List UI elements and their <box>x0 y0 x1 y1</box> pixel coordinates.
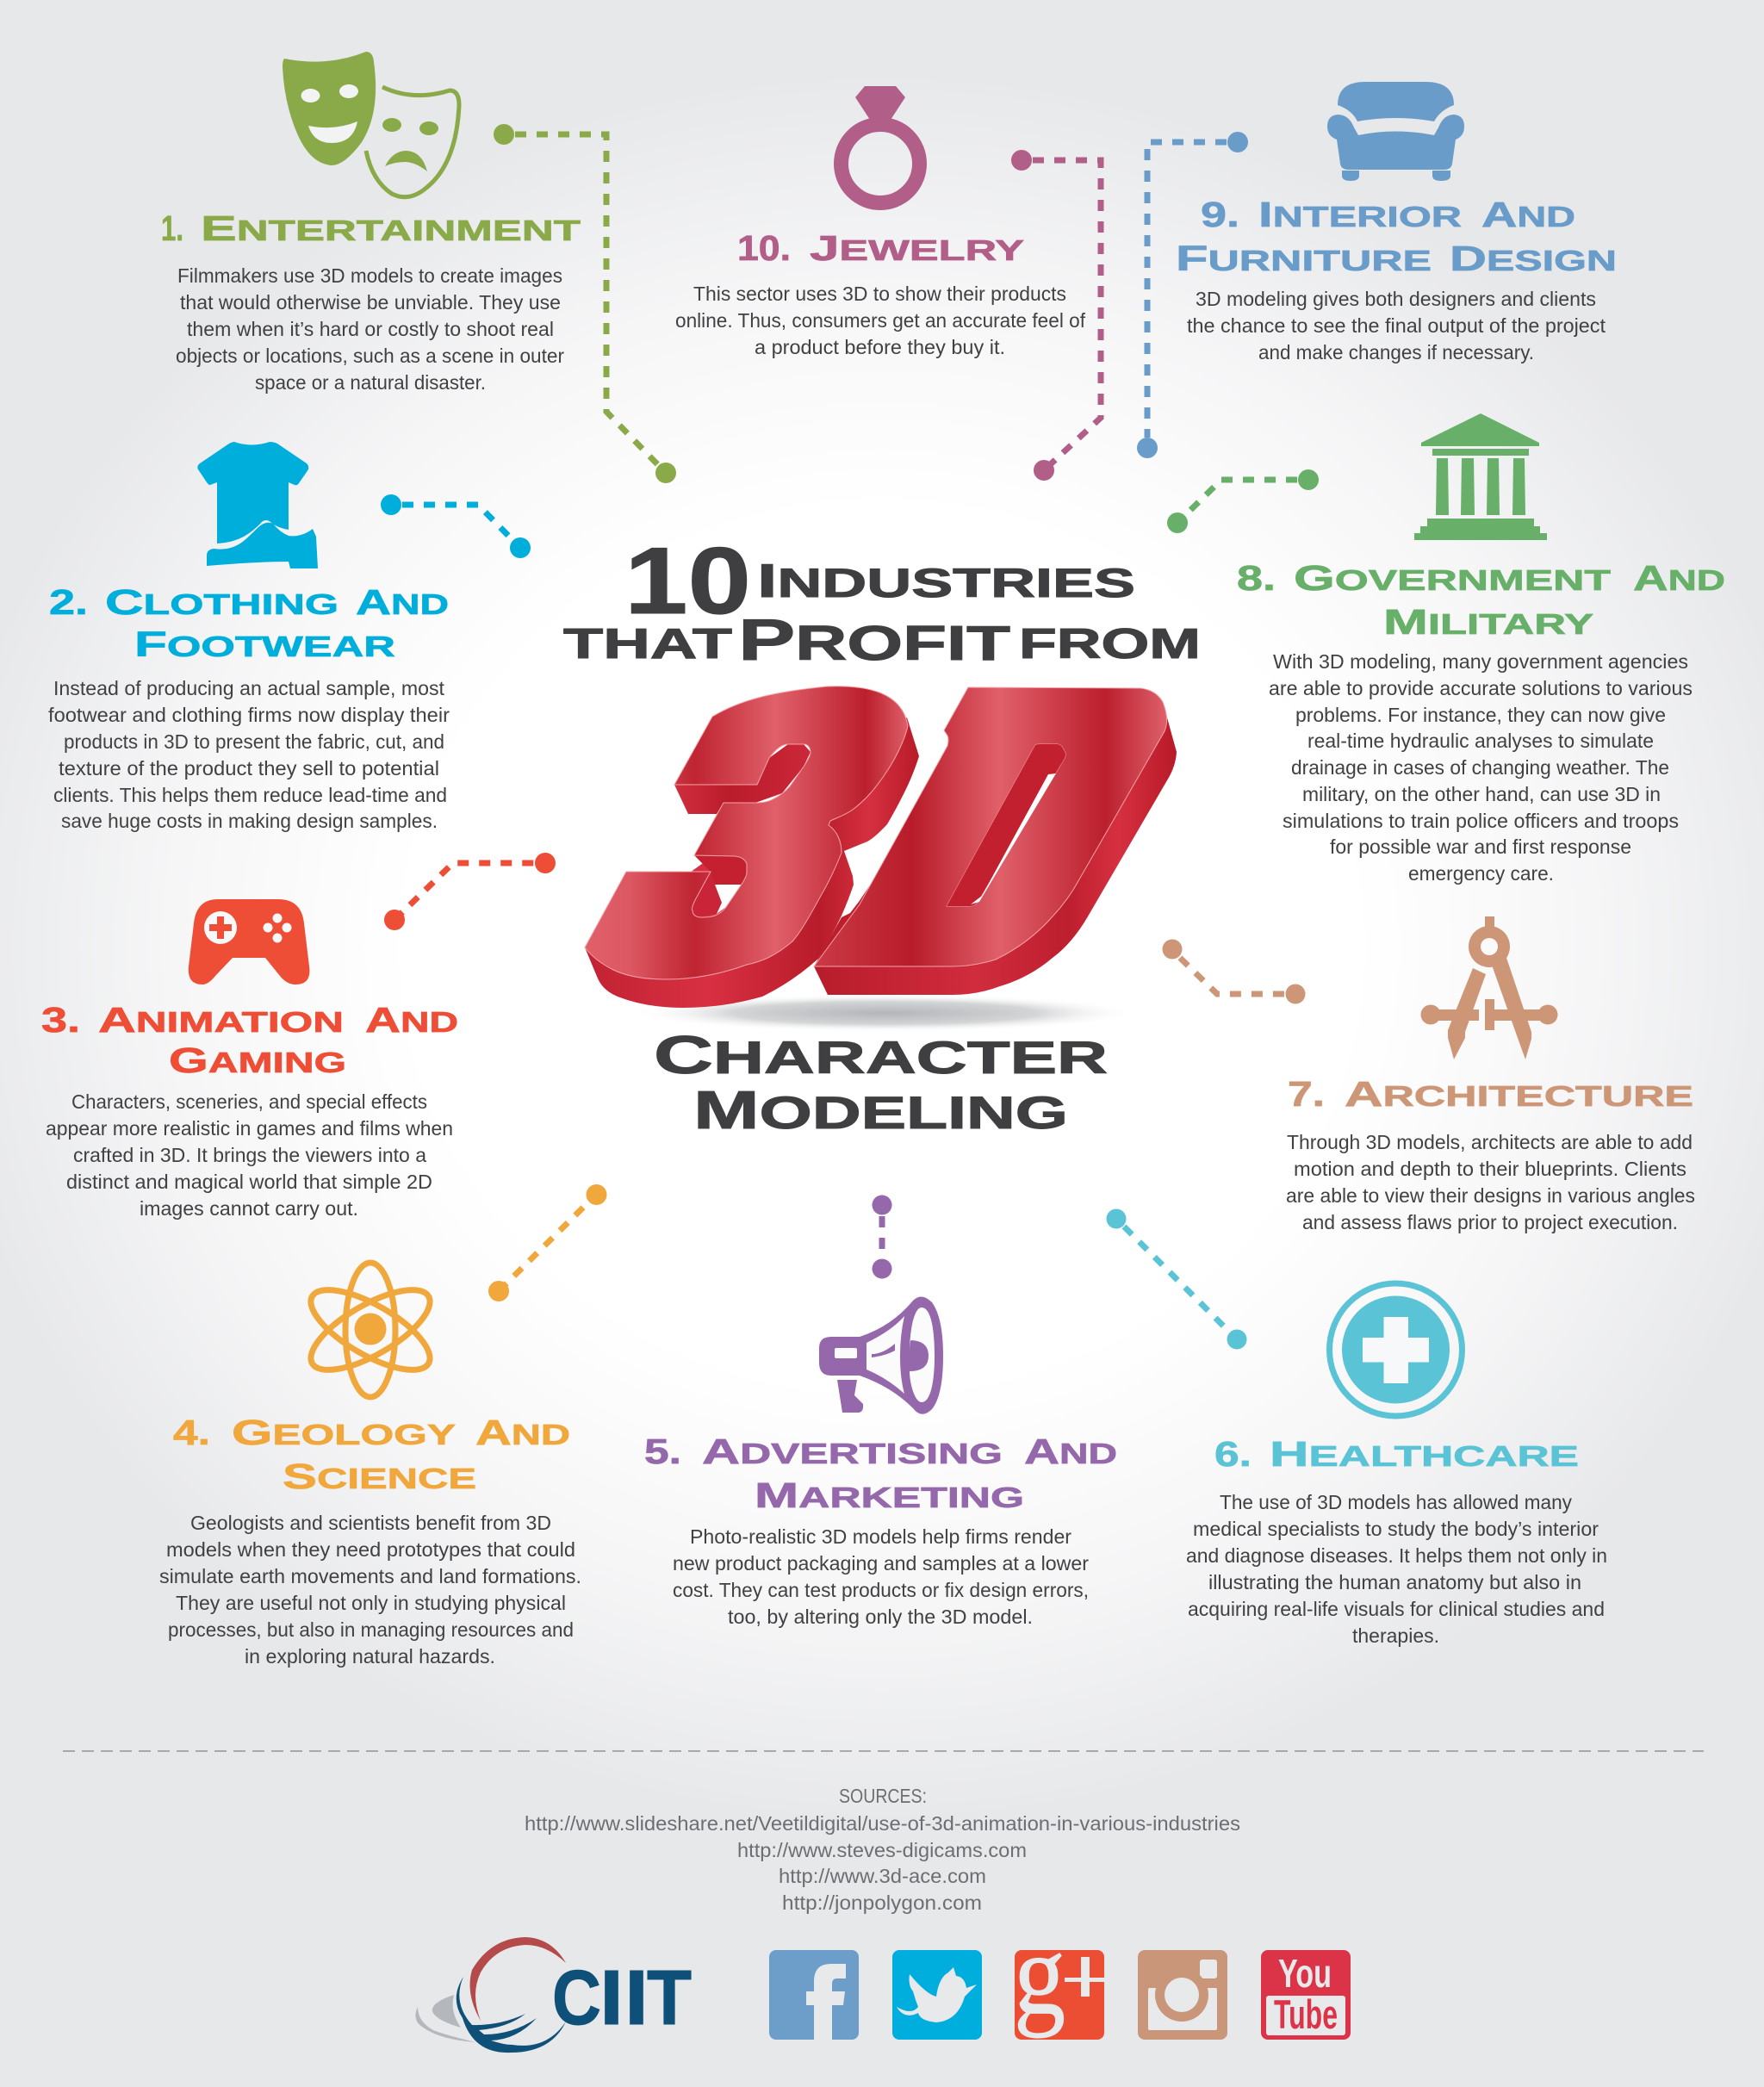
title: that Profit from: THAT <box>563 621 732 668</box>
heading: Government and Military: A ND <box>1633 558 1725 598</box>
text: Government description: drainage in cases of changing weather. The <box>1291 756 1669 779</box>
text: Clothing description: clients. This helps them reduce lead-time and <box>53 784 447 806</box>
text: sources: http://www.slideshare.net/Veetildigital/use-of-3d-animation-in-various-industries <box>525 1812 1240 1835</box>
text: Clothing description: Instead of producing an actual sample, most <box>53 677 444 699</box>
title: 10 Industries <box>624 528 1135 634</box>
heading: Clothing and Footwear: F OOTWEAR <box>134 624 395 664</box>
icon: shirt and shoe <box>197 442 318 568</box>
heading: Geology and Science: 4. <box>173 1413 210 1452</box>
heading: Architecture: A RCHITECTURE <box>1345 1074 1693 1114</box>
text: Animation description: images cannot carry out. <box>140 1197 358 1220</box>
heading: Interior and Furniture Design: 9. <box>1201 195 1239 234</box>
icon: ring <box>841 86 920 203</box>
graphic: red 3D letters <box>585 686 1177 1032</box>
heading: Animation and Gaming: A NIMATION <box>98 1000 344 1040</box>
heading: Jewelry: J EWELRY <box>810 228 1024 268</box>
heading: Clothing and Footwear: A ND <box>356 582 449 622</box>
icon: atom <box>300 1263 441 1397</box>
heading: Geology and Science: A ND <box>475 1413 570 1452</box>
heading: Government and Military: G OVERNMENT <box>1294 558 1612 598</box>
text: Geology description: in exploring natural hazards. <box>245 1645 495 1668</box>
heading: Animation and Gaming: G AMING <box>169 1040 346 1080</box>
text: Jewelry description: a product before they buy it. <box>755 336 1005 358</box>
text: sources: http://jonpolygon.com <box>782 1891 982 1914</box>
text: Healthcare description: and diagnose diseases. It helps them not only in <box>1186 1544 1607 1567</box>
icon: Twitter <box>892 1950 982 2040</box>
text: Advertising description: cost. They can test products or fix design errors, <box>673 1579 1089 1601</box>
icon: sofa <box>1327 82 1464 181</box>
icon: Instagram <box>1138 1950 1227 2040</box>
text: Advertising description <box>673 1525 1089 1628</box>
heading: Government and Military: 8. <box>1237 558 1276 598</box>
arrow: Animation connector <box>384 853 556 930</box>
title: Character Modeling: M ODELING <box>693 1081 1068 1140</box>
text: Geology description: Geologists and scientists benefit from 3D <box>190 1512 551 1534</box>
icon: Google Plus: g <box>1014 1910 1065 2039</box>
text: Animation description: Characters, sceneries, and special effects <box>71 1090 427 1113</box>
heading: Interior and Furniture Design: INTERIOR <box>1258 195 1462 234</box>
arrow: Government connector <box>1167 469 1319 533</box>
arrow: Interior connector <box>1137 132 1248 458</box>
title: Character Modeling <box>654 1026 1108 1140</box>
text: Government description: simulations to train police officers and troops <box>1283 810 1679 832</box>
text: Government description: emergency care. <box>1408 862 1554 885</box>
icon: theatre masks <box>283 52 459 197</box>
text: Entertainment description: that would otherwise be unviable. They use <box>180 291 561 314</box>
panel: 7. Architecture <box>1163 916 1695 1233</box>
heading: Advertising and Marketing: 5. <box>644 1432 681 1471</box>
panel: 8. Government and Military <box>1167 413 1725 885</box>
heading: Geology and Science <box>173 1413 570 1496</box>
arrow: Clothing connector <box>381 494 531 558</box>
text: Advertising description: too, by altering only the 3D model. <box>728 1606 1033 1628</box>
title <box>563 528 1201 1140</box>
heading: Advertising and Marketing <box>644 1432 1117 1515</box>
heading: Interior and Furniture Design: D ESIGN <box>1450 239 1617 278</box>
panel: 5. Advertising and Marketing <box>644 1196 1117 1628</box>
heading: Architecture <box>1288 1074 1693 1114</box>
text: Healthcare description: therapies. <box>1352 1624 1439 1647</box>
text: Government description: problems. For instance, they can now give <box>1295 704 1666 726</box>
icon: game controller <box>189 899 309 984</box>
heading: Geology and Science: S CIENCE <box>283 1457 476 1496</box>
text: Clothing description <box>48 677 450 832</box>
text: Entertainment description: objects or locations, such as a scene in outer <box>176 345 564 367</box>
text: Clothing description: footwear and clothing firms now display their <box>48 704 450 726</box>
arrow: Architecture connector <box>1163 939 1306 1004</box>
title: 10 Industries: INDUSTRIES <box>757 554 1135 607</box>
text: Government description: military, on the other hand, can use 3D in <box>1302 783 1661 805</box>
heading: Interior and Furniture Design: F URNITURE <box>1176 239 1432 278</box>
heading: Animation and Gaming: A ND <box>365 1000 458 1040</box>
icon: megaphone <box>819 1296 943 1414</box>
title: that Profit from: P ROFIT <box>738 607 1010 673</box>
text: Entertainment description: space or a natural disaster. <box>255 371 486 394</box>
text: Animation description: distinct and magical world that simple 2D <box>66 1171 432 1193</box>
text: Clothing description: products in 3D to present the fabric, cut, and <box>64 730 444 753</box>
heading: Government and Military: M ILITARY <box>1383 602 1593 642</box>
text: Interior description: and make changes if necessary. <box>1258 341 1534 363</box>
heading: Advertising and Marketing: A ND <box>1024 1432 1117 1471</box>
text: Architecture description <box>1286 1131 1695 1233</box>
panel: 3. Animation and Gaming <box>41 853 556 1220</box>
text: Clothing description: save huge costs in making design samples. <box>61 810 438 832</box>
text: Government description: With 3D modeling, many government agencies <box>1273 650 1688 673</box>
text: sources: http://www.3d-ace.com <box>779 1865 986 1887</box>
text: Architecture description: and assess flaws prior to project execution. <box>1302 1211 1678 1233</box>
heading: Advertising and Marketing: A DVERTISING <box>702 1432 1003 1471</box>
title: Character Modeling: C HARACTER <box>654 1026 1108 1085</box>
heading: Entertainment <box>161 208 581 248</box>
heading: Entertainment: 1. <box>161 208 183 248</box>
text: Entertainment description: Filmmakers use 3D models to create images <box>177 264 562 287</box>
icon: YouTube: You <box>1278 1951 1332 1996</box>
logo: CIIT <box>415 1937 692 2053</box>
icon: YouTube <box>1261 1950 1351 2040</box>
icon: Facebook <box>769 1950 859 2040</box>
arrow: Advertising connector <box>872 1196 892 1278</box>
text: Geology description: They are useful not only in studying physical <box>176 1592 566 1614</box>
text: Geology description <box>159 1512 581 1668</box>
heading: Government and Military <box>1237 558 1725 642</box>
text: Advertising description: Photo-realistic 3D models help firms render <box>690 1525 1071 1548</box>
heading: Healthcare: 6. <box>1214 1434 1252 1474</box>
heading: Interior and Furniture Design: A ND <box>1481 195 1575 234</box>
heading: Interior and Furniture Design <box>1176 195 1617 278</box>
icon: YouTube: Tube <box>1274 1991 1338 2037</box>
heading: Architecture: 7. <box>1288 1074 1325 1114</box>
heading: Healthcare <box>1214 1434 1579 1474</box>
text: Government description: real-time hydraulic analyses to simulate <box>1307 730 1654 752</box>
panel: 6. Healthcare <box>1106 1209 1607 1647</box>
panel: 9. Interior and Furniture Design <box>1137 82 1617 458</box>
heading: Clothing and Footwear: C LOTHING <box>105 582 339 622</box>
panel: 4. Geology and Science <box>159 1184 606 1668</box>
text: sources <box>525 1785 1240 1914</box>
heading: Geology and Science: G EOLOGY <box>232 1413 456 1452</box>
text: sources: SOURCES: <box>839 1785 927 1807</box>
text: Geology description: processes, but also in managing resources and <box>168 1618 574 1641</box>
arrow: Jewelry connector <box>1011 150 1101 481</box>
text: Geology description: simulate earth movements and land formations. <box>159 1565 581 1587</box>
logo: CIIT: C <box>552 1955 601 2041</box>
logo: CIIT: T <box>647 1955 692 2041</box>
text: Government description <box>1269 650 1693 885</box>
text: Interior description: the chance to see the final output of the project <box>1187 314 1606 337</box>
text: Animation description: appear more realistic in games and films when <box>46 1117 453 1140</box>
panel: 2. Clothing and Footwear <box>48 442 531 832</box>
heading: Entertainment: E NTERTAINMENT <box>201 208 581 248</box>
text: Animation description: crafted in 3D. It brings the viewers into a <box>73 1144 427 1166</box>
text: Jewelry description <box>675 283 1085 358</box>
text: Jewelry description: This sector uses 3D to show their products <box>693 283 1066 305</box>
text: Animation description <box>46 1090 453 1220</box>
text: Healthcare description: acquiring real-life visuals for clinical studies and <box>1188 1598 1605 1620</box>
arrow: Entertainment connector <box>494 124 676 483</box>
text: Jewelry description: online. Thus, consumers get an accurate feel of <box>675 309 1085 332</box>
heading: Jewelry <box>737 228 1024 268</box>
heading: Clothing and Footwear <box>49 582 449 664</box>
heading: Animation and Gaming: 3. <box>41 1000 80 1040</box>
text: Architecture description: motion and depth to their blueprints. Clients <box>1294 1158 1686 1180</box>
text: sources: http://www.steves-digicams.com <box>737 1839 1027 1861</box>
icon: government building <box>1414 413 1547 540</box>
text: Architecture description: Through 3D models, architects are able to add <box>1287 1131 1693 1153</box>
arrow: Geology connector <box>488 1184 606 1301</box>
heading: Clothing and Footwear: 2. <box>49 582 88 622</box>
logo: CIIT: I <box>599 1955 624 2041</box>
text: Entertainment description <box>176 264 564 394</box>
text: Clothing description: texture of the product they sell to potential <box>59 757 439 780</box>
heading: Advertising and Marketing: M ARKETING <box>755 1475 1024 1515</box>
title: that Profit from: FROM <box>1019 621 1201 668</box>
text: Government description: for possible war and first response <box>1330 835 1631 858</box>
icon: compass <box>1421 916 1557 1059</box>
heading: Animation and Gaming <box>41 1000 458 1080</box>
text: Healthcare description: The use of 3D models has allowed many <box>1220 1491 1572 1513</box>
title: that Profit from <box>563 607 1201 673</box>
text: Architecture description: are able to view their designs in various angles <box>1286 1184 1695 1207</box>
heading: Jewelry: 10. <box>737 228 791 268</box>
logo: CIIT: I <box>624 1955 649 2041</box>
text: Entertainment description: them when it’s hard or costly to shoot real <box>187 318 554 340</box>
text: Healthcare description: illustrating the human anatomy but also in <box>1208 1571 1581 1593</box>
panel: 1. Entertainment <box>161 52 676 483</box>
title: 10 Industries: 10 <box>624 528 751 634</box>
heading: Healthcare: H EALTHCARE <box>1270 1434 1579 1474</box>
text: Healthcare description: medical specialists to study the body’s interior <box>1193 1518 1599 1540</box>
arrow: Healthcare connector <box>1106 1209 1247 1349</box>
text: Geology description: models when they need prototypes that could <box>166 1538 575 1561</box>
text: Interior description: 3D modeling gives both designers and clients <box>1196 288 1596 310</box>
text: Healthcare description <box>1186 1491 1607 1647</box>
text: Government description: are able to provide accurate solutions to various <box>1269 677 1693 699</box>
text: Advertising description: new product packaging and samples at a lower <box>673 1552 1089 1575</box>
panel: 10. Jewelry <box>675 86 1101 481</box>
text: Interior description <box>1187 288 1606 363</box>
icon: medical cross <box>1330 1283 1463 1416</box>
icon: Google Plus <box>1015 1950 1104 2040</box>
